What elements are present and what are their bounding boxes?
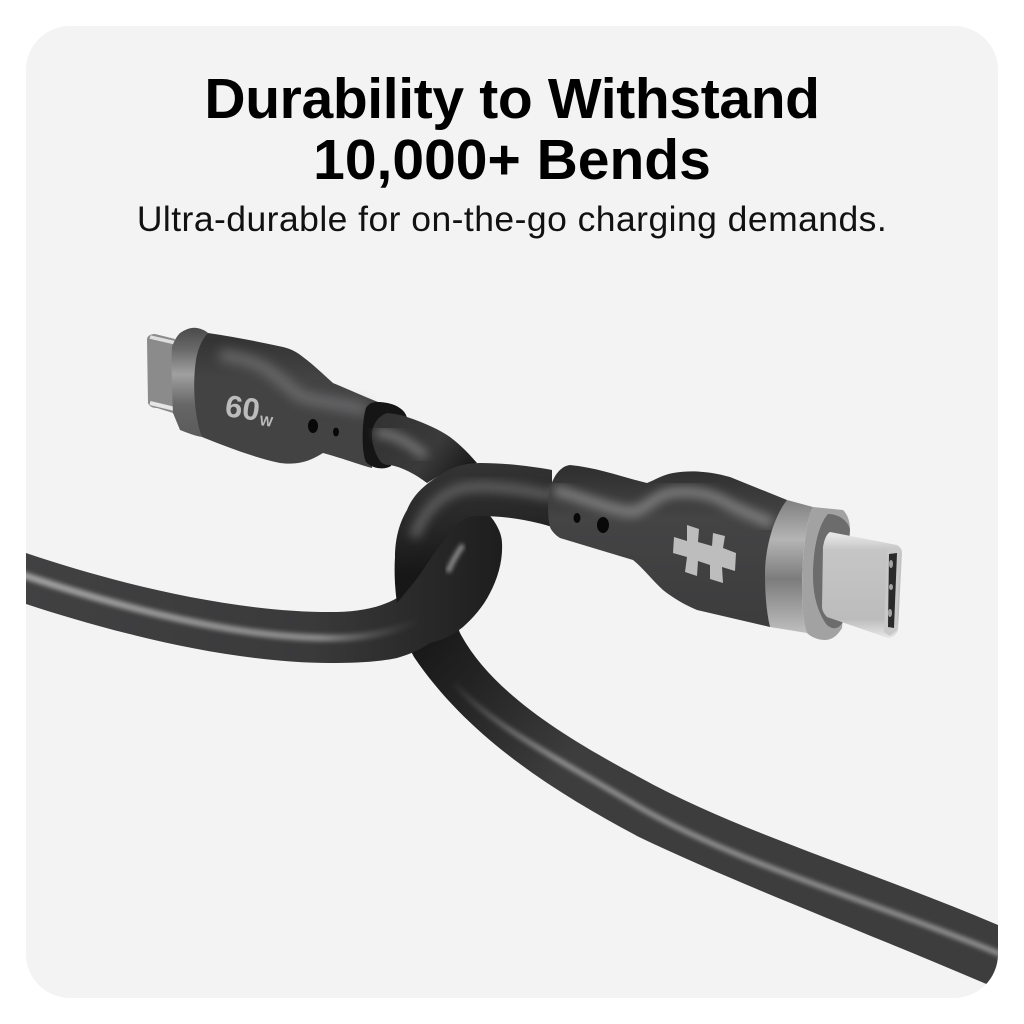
right connector holes	[574, 513, 609, 533]
black strain collar	[363, 402, 407, 468]
right connector body	[548, 465, 787, 627]
right metal ring	[802, 507, 850, 640]
left metal collar	[172, 328, 208, 437]
right metal band	[765, 500, 813, 633]
left connector holes	[308, 419, 339, 436]
right body highlight	[554, 490, 772, 523]
title: 10,000+ Bends	[313, 128, 711, 192]
title: Durability to Withstand	[204, 67, 820, 131]
left plug	[147, 334, 176, 413]
subtitle: Ultra-durable for on-the-go charging demands.	[137, 199, 887, 239]
left body highlight	[220, 355, 366, 410]
label: 60W: W	[259, 412, 275, 430]
right USB-C connector	[548, 465, 902, 640]
right plug	[822, 532, 902, 638]
icon: brand logo mark	[673, 525, 736, 583]
lower cable strand	[405, 620, 1005, 992]
left USB-C connector	[147, 328, 407, 468]
title	[204, 67, 820, 192]
ring inner face	[813, 514, 850, 628]
label: 60W	[226, 396, 274, 426]
upper cable from left connector	[372, 413, 477, 483]
cable illustration	[26, 328, 998, 984]
left connector body	[194, 333, 378, 468]
label: 60W: 60	[223, 388, 262, 428]
left cable strand with hook	[26, 516, 502, 663]
loop strand to right connector	[395, 463, 552, 603]
